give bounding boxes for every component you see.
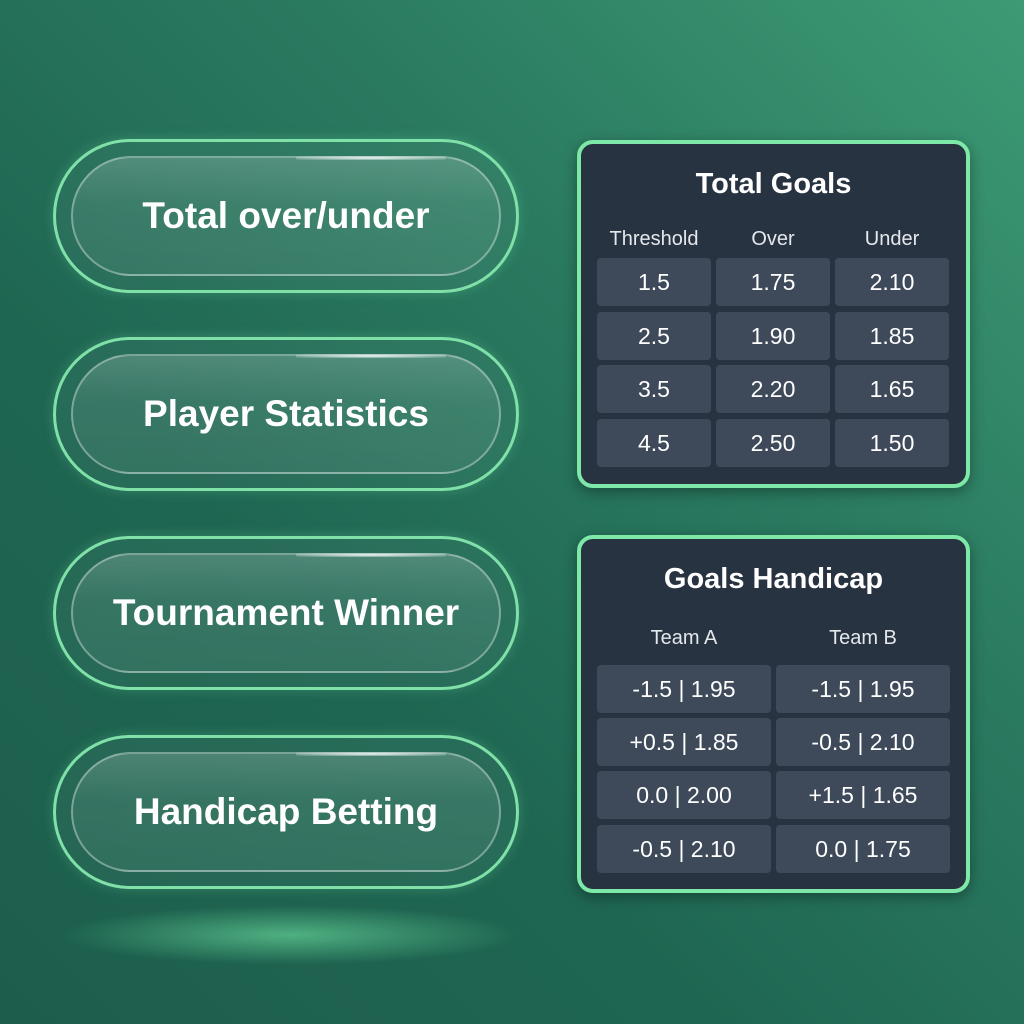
table cells: -0.5 | 2.10 <box>632 836 736 862</box>
pill: Handicap Betting: Handicap Betting <box>134 791 438 832</box>
glow under pills <box>60 905 520 965</box>
heading: Goals Handicap: Goals Handicap <box>664 563 883 595</box>
pill: Total over/under: Total over/under <box>142 195 430 236</box>
heading: Total Goals: Total Goals <box>696 168 851 200</box>
table cells: 1.85 <box>870 322 914 348</box>
table cells: -1.5 | 1.95 <box>632 676 736 702</box>
panel: Total Goals table <box>577 140 970 488</box>
table cells: 1.5 <box>638 268 670 294</box>
panel: Goals Handicap table <box>577 535 970 893</box>
table cells <box>597 258 949 467</box>
table cells: 1.75 <box>751 268 795 294</box>
pill: Tournament Winner: Tournament Winner <box>113 592 459 633</box>
table cells: 1.50 <box>870 430 914 456</box>
column headers <box>651 627 897 649</box>
pill: Handicap Betting <box>53 735 519 889</box>
table cells: 2.5 <box>638 322 670 348</box>
pill: Tournament Winner <box>53 536 519 690</box>
table cells: 2.20 <box>751 376 795 402</box>
column headers: Team B <box>829 627 897 649</box>
table cells: +0.5 | 1.85 <box>630 728 738 754</box>
table cells <box>597 665 950 873</box>
column headers: Team A <box>651 627 717 649</box>
pill: Player Statistics: Player Statistics <box>143 393 429 434</box>
table cells: 0.0 | 1.75 <box>815 836 911 862</box>
table cells: -0.5 | 2.10 <box>811 728 915 754</box>
table cells: 0.0 | 2.00 <box>636 782 732 808</box>
table cells: 2.10 <box>870 268 914 294</box>
column headers: Under <box>865 228 919 250</box>
table cells: 1.90 <box>751 322 795 348</box>
table cells: +1.5 | 1.65 <box>809 782 917 808</box>
pill: Total over/under <box>53 139 519 293</box>
table cells: 2.50 <box>751 430 795 456</box>
pill: Player Statistics <box>53 337 519 491</box>
column headers <box>610 228 919 250</box>
table cells: 1.65 <box>870 376 914 402</box>
table cells: -1.5 | 1.95 <box>811 676 915 702</box>
column headers: Over <box>751 228 795 250</box>
table cells: 3.5 <box>638 376 670 402</box>
column headers: Threshold <box>610 228 698 250</box>
table cells: 4.5 <box>638 430 670 456</box>
